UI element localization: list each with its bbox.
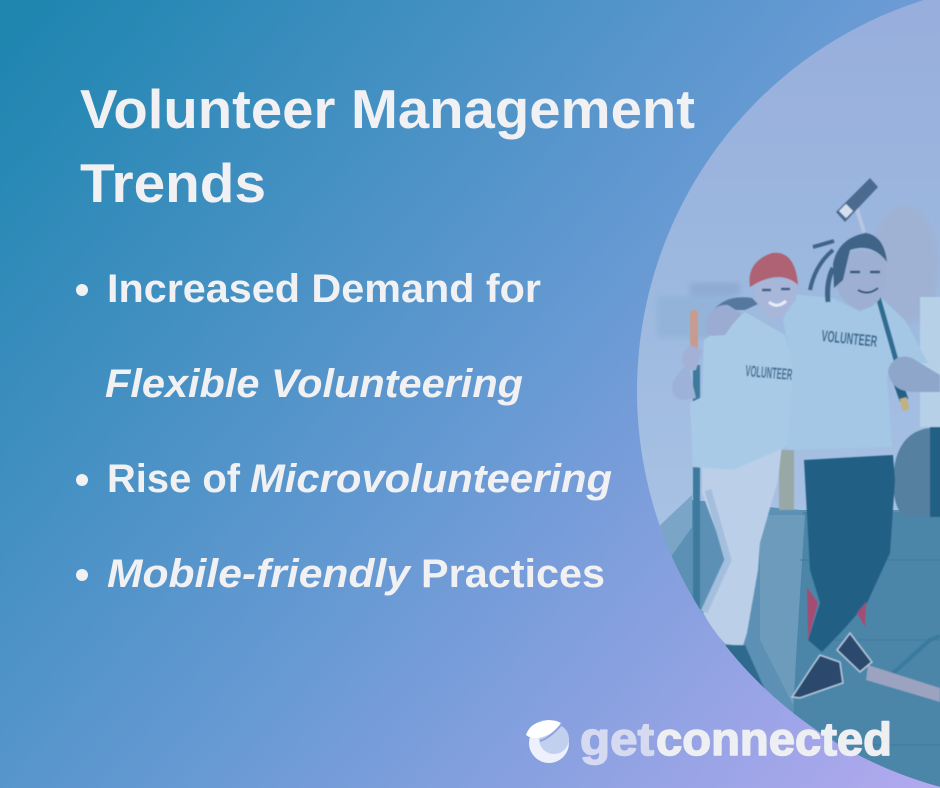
bullet: mobile-friendly practices bbox=[76, 552, 605, 596]
broom on ground bbox=[866, 636, 940, 702]
bullet: mobile-friendly practices: Practices bbox=[421, 552, 605, 596]
title: Volunteer Management bbox=[80, 78, 695, 140]
background person bbox=[920, 297, 940, 517]
man's shirt bbox=[783, 294, 928, 450]
bullet: microvolunteering: Rise of bbox=[107, 457, 241, 501]
mop over man's shoulder bbox=[836, 178, 906, 410]
photo background: sky and street bbox=[630, 0, 940, 788]
title: Trends bbox=[80, 152, 266, 214]
logo: getconnected bbox=[526, 713, 892, 765]
wordmark: connected bbox=[656, 713, 892, 765]
man's shirt lettering: VOLUNTEER bbox=[821, 328, 878, 351]
woman's shirt and arm bbox=[672, 312, 795, 470]
woman's mop handle bbox=[690, 310, 700, 617]
man's sneakers bbox=[792, 633, 872, 698]
woman's head and bandana bbox=[749, 253, 798, 318]
woman's trousers bbox=[702, 445, 782, 690]
man's head and hair bbox=[810, 233, 887, 310]
bullet: flexible volunteering: Increased Demand for bbox=[107, 267, 541, 311]
photo: volunteers in circular crop bbox=[630, 0, 940, 788]
bullet: microvolunteering: Microvolunteering bbox=[250, 457, 612, 501]
icon: logo mark bbox=[526, 720, 569, 763]
yellow post bbox=[779, 450, 794, 510]
bullet: microvolunteering bbox=[76, 457, 612, 501]
title bbox=[80, 78, 695, 214]
bullet: flexible volunteering: Flexible Volunteering bbox=[105, 362, 523, 406]
shrub bbox=[893, 428, 930, 516]
photo: volunteers in circular crop: VOLUNTEER bbox=[745, 363, 793, 384]
bullet: flexible volunteering bbox=[76, 267, 541, 406]
wordmark: get bbox=[580, 713, 654, 765]
man's arm around woman bbox=[705, 297, 758, 336]
man's trousers bbox=[804, 455, 895, 652]
man's hand on mop bbox=[888, 356, 940, 392]
bullet: mobile-friendly practices: Mobile-friendly bbox=[107, 552, 412, 596]
